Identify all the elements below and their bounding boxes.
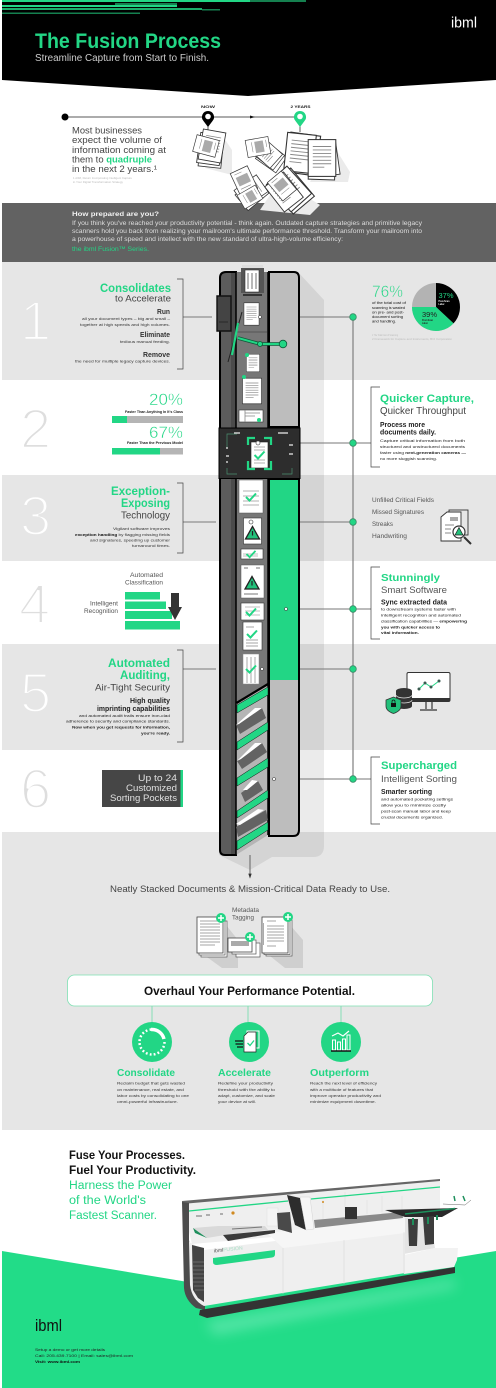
volume statement: information coming at — [72, 145, 166, 156]
panel: how prepared — [72, 211, 423, 253]
stat 67 percent: 67% — [149, 423, 183, 442]
panel: supercharged sorting: crucial documents organized. — [381, 814, 443, 820]
body text: the ibml Fusion™ Series. — [72, 246, 149, 253]
panel: supercharged sorting: allow you to minimize costly — [381, 802, 446, 808]
body text: scanners hold you back from realizing your mailroom's ultimate performance threshold. Transform your mailroom into — [72, 229, 423, 235]
pile 2 — [245, 136, 287, 173]
icon: accelerate — [229, 1022, 269, 1062]
stat description: scanning is wasted — [372, 306, 405, 310]
run: together at high speeds and high volumes. — [80, 322, 170, 327]
body text: If you think you've reached your productivity potential - think again. Outdated capture strategies and primitive legacy — [72, 221, 422, 227]
footnote: 1 The Total Cost of Scanning — [372, 334, 398, 337]
panel: exception-exposing: Exposing — [121, 496, 170, 510]
column: accelerate: your device at will. — [218, 1099, 256, 1104]
panel: exception-exposing: Vigilant software improves — [113, 526, 170, 531]
panel: automated auditing: you're ready. — [141, 731, 170, 735]
scanner diagram — [217, 265, 300, 855]
vent — [192, 1245, 204, 1302]
left column — [220, 272, 236, 855]
column: accelerate: Accelerate — [218, 1067, 271, 1079]
footer headline: Fuse Your Processes. — [69, 1150, 185, 1162]
panel: automated auditing: Auditing, — [120, 668, 170, 682]
volume statement: expect the volume of — [72, 135, 162, 146]
body text: a powerhouse of speed and intellect with the new standard of ultra-high-volume efficiency: — [72, 237, 343, 243]
callout: sorting pockets: Customized — [126, 783, 177, 794]
eliminate — [120, 332, 170, 344]
back panel — [182, 1181, 440, 1244]
column: outperform: Outperform — [310, 1067, 369, 1079]
panel: supercharged sorting: Supercharged — [381, 760, 457, 772]
panel: stunningly smart software: intelligent recognition and automated — [381, 612, 461, 618]
remove — [75, 352, 170, 364]
panel: supercharged sorting — [381, 760, 457, 820]
heading: How prepared are you? — [72, 211, 159, 218]
panel: supercharged sorting: Intelligent Sorting — [381, 774, 457, 785]
timeline section — [62, 104, 350, 215]
dark side — [182, 1202, 205, 1310]
connector lines — [177, 279, 380, 824]
top accent stripes — [2, 0, 306, 14]
side module — [217, 296, 231, 331]
run — [80, 309, 171, 327]
column: accelerate: Redefine your productivity — [218, 1081, 273, 1086]
label: automated classification — [125, 573, 163, 586]
panel: automated auditing: Air-Tight Security — [95, 682, 170, 694]
contact details: Visit: www.ibml.com — [35, 1360, 81, 1364]
footnote — [73, 177, 133, 184]
green connector nodes — [350, 314, 356, 782]
volume statement — [72, 126, 166, 175]
pie chart: 39% — [422, 312, 437, 319]
panel: cost statistic — [372, 283, 460, 341]
column: outperform: with a multitude of features that — [310, 1087, 374, 1092]
pile 4 — [230, 166, 269, 211]
column: accelerate — [218, 1022, 276, 1104]
panel: stunningly smart software: Stunningly — [381, 572, 440, 584]
panel: stunningly smart software — [381, 572, 468, 635]
output arrow — [249, 855, 251, 878]
right end body — [404, 1218, 458, 1274]
panel: quicker capture: Capture critical information from both — [380, 438, 465, 443]
track — [314, 1212, 403, 1228]
footnote: 1 AIIM, Return Incorporating Intelligent Capture — [73, 177, 133, 180]
pie chart: Labor — [438, 303, 445, 306]
column: consolidate: Consolidate — [117, 1067, 175, 1079]
ground glow — [205, 1280, 455, 1335]
column: consolidate: omni-powerful infrastructure. — [117, 1099, 178, 1104]
panel: quicker capture: documents daily. — [380, 430, 436, 436]
volume statement: them to quadruple — [72, 154, 152, 166]
panel: automated auditing — [66, 656, 170, 735]
step numerals: 5 — [20, 661, 51, 724]
scanner shadow — [219, 272, 324, 870]
panel: stunningly smart software: vital information. — [381, 630, 419, 635]
stat 20 percent: 20% — [149, 390, 183, 409]
stat description — [372, 301, 406, 324]
overhaul box — [68, 975, 432, 1024]
panel: consolidates — [75, 281, 171, 364]
callout: sorting pockets: Up to 24 — [138, 773, 177, 784]
machine illustration — [182, 1179, 471, 1335]
output trays — [454, 1196, 465, 1201]
pie chart — [412, 283, 460, 331]
panel: quicker capture: no more sluggish scanning. — [380, 456, 437, 461]
contact details: Call: 205.439.7100 | Email: sales@ibml.com — [35, 1354, 133, 1358]
middle stack — [228, 938, 260, 957]
column: outperform: improve operator productivity and — [310, 1093, 381, 1098]
stat description: on pre- and post- — [372, 311, 405, 315]
footnote: 2 Framework for Capture and Instruments, BCI Corporation — [372, 338, 453, 341]
stat description: document sorting — [372, 315, 403, 319]
step numerals: 3 — [20, 484, 51, 547]
label — [232, 908, 260, 922]
panel: automated auditing: adherence to security and compliance standards. — [66, 720, 170, 724]
footer headline — [69, 1150, 196, 1222]
panel: stunningly smart software: to downstream systems faster with — [381, 607, 456, 612]
verified documents — [239, 480, 264, 684]
label: Metadata — [232, 908, 260, 914]
feeder — [193, 1226, 268, 1238]
right column — [269, 272, 299, 427]
panel: quicker capture: faster using next-generation cameras — — [380, 450, 466, 455]
brand text: ibmlFUSION — [214, 1245, 243, 1254]
exceptions list: Streaks — [372, 521, 394, 528]
bar 67 percent — [112, 448, 183, 454]
metadata tagging — [197, 908, 303, 968]
step numerals: 6 — [20, 757, 51, 820]
feeder — [241, 265, 264, 296]
panel: stunningly smart software: Smart Software — [381, 585, 447, 596]
top edge — [182, 1179, 440, 1204]
node markers on the scanner — [258, 316, 288, 780]
stacked bars — [125, 592, 180, 630]
label: intelligent recognition: Recognition — [84, 609, 118, 615]
panel: stunningly smart software: you with quicker access to — [381, 624, 441, 629]
column: accelerate: adapt, customize, and scale — [218, 1093, 276, 1098]
column: outperform: minimize equipment downtime. — [310, 1099, 376, 1104]
footer green wedge — [2, 1251, 496, 1388]
stat: 76% — [372, 283, 403, 301]
step numerals: 1 — [20, 289, 51, 352]
exceptions list: Unfilled Critical Fields — [372, 497, 435, 504]
front body — [189, 1218, 405, 1306]
panel: stunningly smart software: Sync extracted data — [381, 600, 447, 606]
alignment arm — [228, 312, 287, 362]
footnote: in Your Digital Transformation Strategy — [73, 181, 124, 184]
pile 3 — [284, 132, 340, 180]
center column — [236, 272, 268, 428]
bar 20 percent — [112, 416, 183, 423]
panel: automated auditing: imprinting capabilities — [97, 706, 170, 713]
panel: quicker capture: Process more — [380, 422, 425, 429]
arrow — [168, 593, 182, 620]
pie chart: Post-Scan — [422, 319, 433, 322]
sorter — [385, 1208, 458, 1217]
stat description: and handling. — [372, 320, 396, 324]
icon: secure data monitor — [386, 672, 450, 714]
footer headline: Fuel Your Productivity. — [69, 1165, 196, 1177]
panel: quicker capture — [380, 393, 474, 461]
panel: exception-exposing — [75, 484, 171, 548]
logo: ibml — [451, 14, 477, 32]
eliminate: tedious manual feeding. — [120, 339, 170, 344]
callout: sorting pockets: Sorting Pockets — [110, 793, 177, 804]
panel: classification stack — [84, 573, 182, 630]
subheading: to Accelerate — [115, 294, 171, 304]
contact details — [35, 1348, 133, 1364]
label: automated classification: Classification — [125, 580, 163, 586]
step numerals: 2 — [20, 397, 51, 460]
footer headline: of the World's — [69, 1195, 146, 1207]
step numerals — [19, 289, 51, 820]
camera module — [219, 428, 300, 478]
run: Run — [157, 309, 170, 316]
column: accelerate: threshold with the ability to — [218, 1087, 276, 1092]
pile 1 — [193, 129, 226, 168]
panel: automated auditing: Automated — [108, 656, 170, 670]
remove: Remove — [143, 352, 170, 359]
stat description: of the total cost of — [372, 301, 406, 305]
pie chart: Labor — [422, 322, 428, 325]
panel: exception-exposing: Exception- — [111, 484, 170, 498]
icon: consolidate — [132, 1022, 172, 1062]
exceptions list: Missed Signatures — [372, 509, 425, 516]
label: automated classification: Automated — [130, 573, 163, 579]
header banner — [2, 0, 496, 96]
pile 5 — [265, 166, 314, 214]
output heading: Neatly Stacked Documents & Mission-Critical Data Ready to Use. — [110, 884, 390, 895]
green stripe — [189, 1187, 440, 1211]
heading: Consolidates — [100, 281, 171, 295]
column: consolidate: labor costs by consolidating to one — [117, 1093, 190, 1098]
transport documents — [239, 303, 263, 422]
plus badges — [216, 912, 293, 942]
control labels — [196, 1214, 223, 1216]
panel: quicker capture: Quicker Capture, — [380, 393, 474, 405]
right stack — [262, 917, 292, 956]
pie chart: 37% — [438, 293, 454, 300]
page background bands — [2, 203, 496, 1130]
sorting pockets — [236, 684, 268, 850]
subtitle: Streamline Capture from Start to Finish. — [35, 53, 209, 64]
panel: supercharged sorting: Smarter sorting — [381, 789, 432, 796]
callout: sorting pockets — [102, 770, 183, 807]
overhaul box: Overhaul Your Performance Potential. — [144, 986, 355, 998]
footer headline: Harness the Power — [69, 1180, 172, 1192]
panel: exception-exposing: Technology — [121, 510, 170, 522]
eliminate: Eliminate — [140, 332, 170, 339]
step numerals: 4 — [19, 572, 50, 635]
column: outperform — [310, 1022, 381, 1104]
column: outperform: Reach the next level of efficiency — [310, 1081, 377, 1086]
panel: automated auditing: High quality — [130, 698, 170, 705]
icon: green pin — [294, 111, 306, 127]
base — [199, 1267, 455, 1318]
icon: outperform — [321, 1022, 361, 1062]
footnote — [372, 334, 453, 341]
exceptions list: Handwriting — [372, 533, 407, 540]
panel: exception-exposing: and signatures, speeding up customer — [90, 537, 171, 542]
label: intelligent recognition: Intelligent — [90, 602, 118, 608]
footer logo: ibml — [35, 1316, 62, 1335]
panel: speed bars: Faster Than Anything In It's Class — [125, 410, 183, 414]
timeline: NOW — [201, 104, 215, 109]
icon: document inspection — [441, 510, 471, 544]
column: consolidate: Reclaim budget that gets wasted — [117, 1081, 185, 1086]
timeline — [62, 104, 311, 132]
panel: exception-exposing: turnaround times. — [132, 543, 170, 548]
scan tower — [287, 1195, 306, 1230]
remove: the need for multiple legacy capture devices. — [75, 358, 170, 364]
feeder unit — [267, 1208, 278, 1226]
panel: quicker capture: Quicker Throughput — [380, 406, 466, 417]
pie chart: Post-Scan — [438, 300, 450, 303]
label: Tagging — [232, 916, 254, 922]
stack shadows — [200, 925, 303, 968]
panel: speed bars — [112, 390, 183, 454]
volume statement: Most businesses — [72, 126, 142, 136]
green label — [213, 1250, 275, 1265]
panel: exception-exposing: exception handling by flagging missing fields — [75, 532, 170, 537]
footer headline: Fastest Scanner. — [69, 1210, 157, 1222]
panel: automated auditing: Now when you get requests for information, — [72, 725, 170, 729]
volume statement: in the next 2 years.¹ — [72, 164, 157, 175]
left stack — [197, 917, 227, 957]
column: consolidate: on maintenance, real estate, and — [117, 1087, 184, 1092]
icon: black pin — [202, 111, 214, 127]
panel: supercharged sorting: and automated pocketing settings — [381, 797, 453, 802]
column: consolidate — [117, 1022, 190, 1104]
document piles — [193, 129, 350, 215]
timeline: 2 YEARS — [290, 104, 311, 109]
panel: automated auditing: and automated audit trails ensure iron-clad — [79, 714, 170, 718]
panel: stunningly smart software: classification capabilities — empowering — [381, 618, 468, 624]
body text — [72, 221, 423, 253]
panel: quicker capture: structured and unstructured documents — [380, 444, 465, 449]
panel: speed bars: Faster Than the Previous Model — [127, 441, 183, 445]
run: all your document types – big and small – — [82, 316, 171, 321]
title: The Fusion Process — [35, 30, 221, 53]
panel: supercharged sorting: post-scan manual labor and keep — [381, 808, 451, 814]
exceptions list — [372, 497, 435, 540]
label: intelligent recognition — [84, 602, 118, 615]
contact details: Setup a demo or get more details — [35, 1348, 105, 1352]
